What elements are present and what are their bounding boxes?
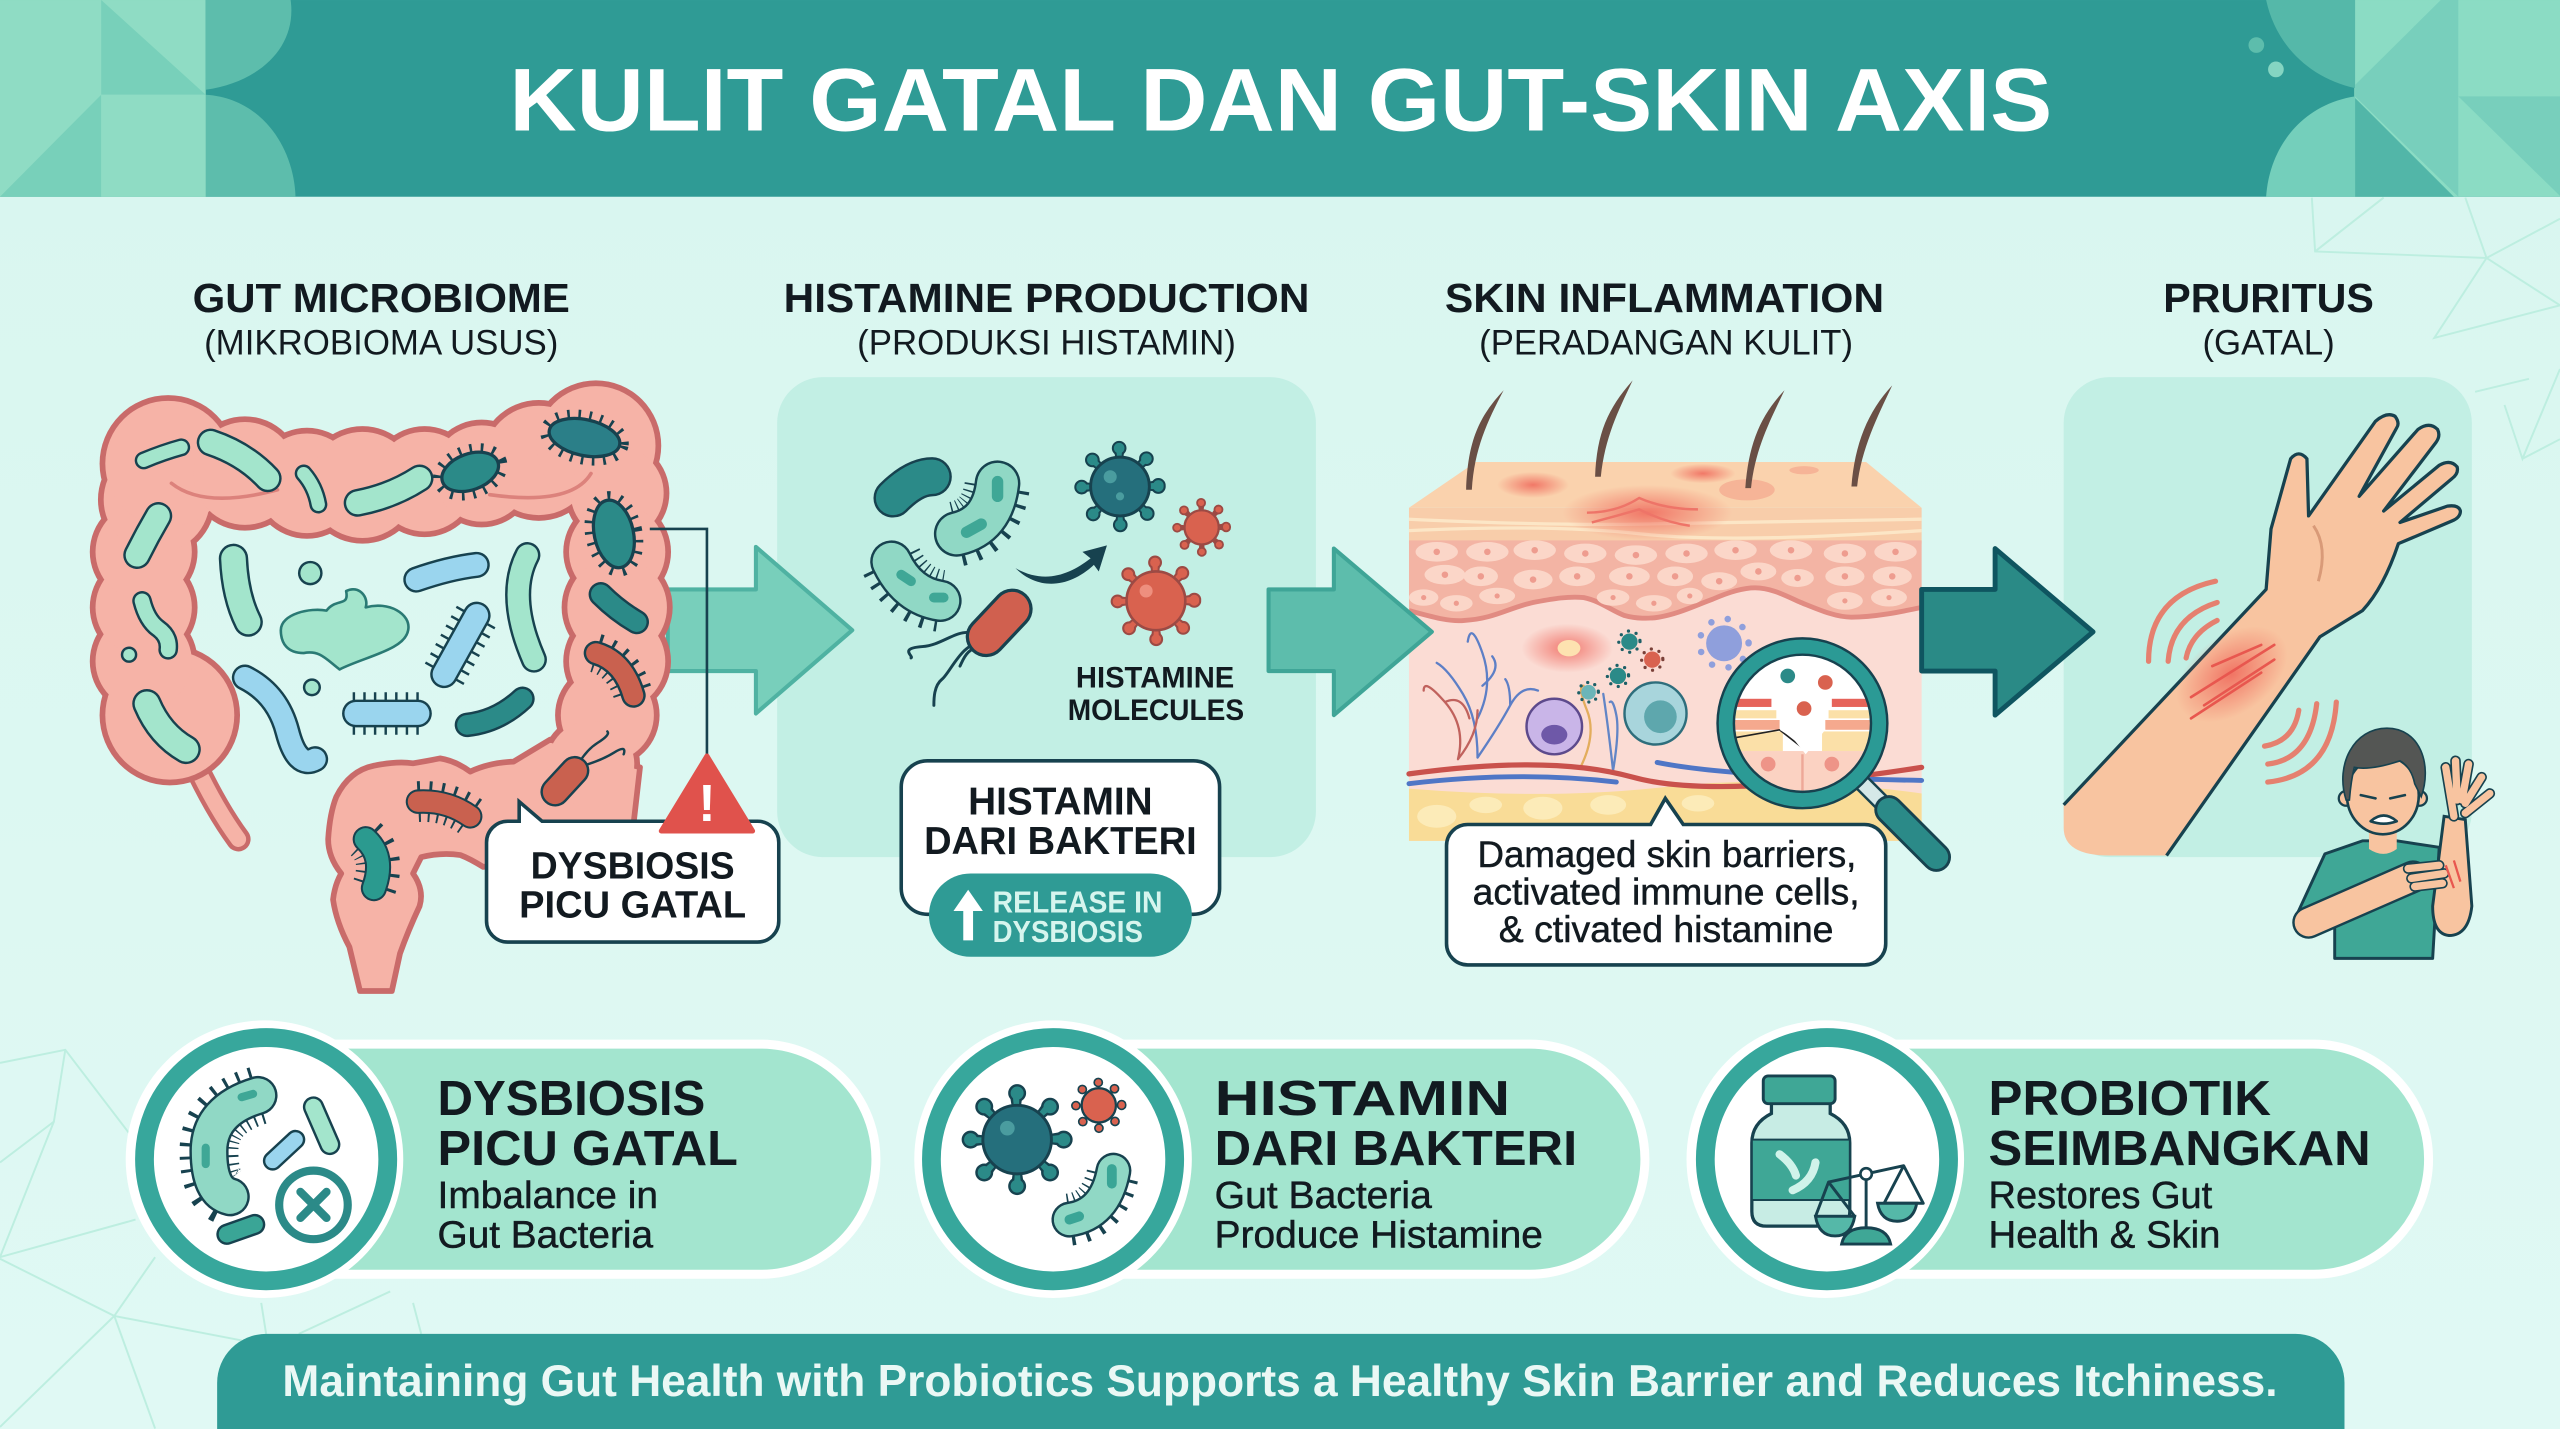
panel: histamine summary: Gut Bacteria — [1215, 1174, 1432, 1216]
panel: histamine summary: Produce Histamine — [1215, 1213, 1543, 1255]
histamine molecules — [1082, 448, 1226, 639]
footer banner: Maintaining Gut Health with Probiotics Supports a Healthy Skin Barrier and Reduces Itchiness. — [282, 1357, 2278, 1406]
panel: dysbiosis summary: Gut Bacteria — [438, 1213, 653, 1255]
label: histamine molecules — [1068, 661, 1244, 727]
panel: pruritus background — [2064, 377, 2472, 857]
itch redness — [2159, 607, 2305, 742]
icon: virus and bacteria — [971, 1082, 1122, 1186]
footer banner — [217, 1334, 2344, 1429]
header decoration left — [0, 0, 296, 197]
callout: dysbiosis picu gatal: PICU GATAL — [519, 884, 746, 926]
callout: histamin dari bakteri: HISTAMIN — [968, 781, 1153, 824]
arrow: histamine to skin — [1269, 549, 1432, 715]
panel: probiotic summary — [1687, 1020, 2429, 1298]
curved arrow — [1016, 545, 1107, 584]
icon: probiotic bottle and scale — [1752, 1076, 1923, 1244]
callout: skin damage description: Damaged skin barriers, — [1478, 834, 1856, 875]
inflammation redness — [1497, 464, 1819, 673]
skin cells — [1409, 540, 1917, 611]
badge: release in dysbiosis — [929, 873, 1192, 957]
heading: skin inflammation: SKIN INFLAMMATION — [1445, 275, 1884, 321]
heading: gut microbiome — [193, 275, 570, 362]
cell nuclei — [1421, 547, 1899, 606]
heading: gut microbiome: GUT MICROBIOME — [193, 275, 570, 321]
panel: dysbiosis summary — [126, 1020, 876, 1298]
bacteria in abdominal space — [233, 555, 534, 761]
callout: skin damage description: activated immune cells, — [1473, 871, 1860, 912]
arrow: skin to pruritus — [1922, 549, 2093, 715]
panel: dysbiosis summary: PICU GATAL — [438, 1122, 738, 1176]
panel: probiotic summary: Health & Skin — [1989, 1213, 2220, 1255]
panel: dysbiosis summary: DYSBIOSIS — [438, 1072, 705, 1126]
label: histamine molecules: HISTAMINE — [1076, 661, 1234, 694]
header decoration right — [2248, 0, 2560, 197]
panel: histamine summary: HISTAMIN — [1215, 1072, 1510, 1126]
skin layers — [1409, 462, 1922, 841]
panel: histamine summary: DARI BAKTERI — [1215, 1122, 1577, 1176]
heading: histamine production: HISTAMINE PRODUCTION — [784, 275, 1309, 321]
heading: pruritus — [2163, 275, 2374, 362]
label: histamine molecules: MOLECULES — [1068, 694, 1244, 727]
heading: gut microbiome: (MIKROBIOMA USUS) — [204, 323, 558, 362]
icon: warning triangle: ! — [698, 775, 716, 833]
illustration: scratching person — [2296, 728, 2490, 958]
badge: release in dysbiosis: DYSBIOSIS — [993, 916, 1143, 949]
heading: pruritus: (GATAL) — [2202, 323, 2335, 362]
heading: skin inflammation — [1445, 275, 1884, 362]
teal and red spiky bacteria in colon — [366, 411, 642, 888]
heading: histamine production — [784, 275, 1309, 362]
panel: dysbiosis summary: Imbalance in — [438, 1174, 658, 1216]
nerves and blood vessels — [1409, 633, 1922, 787]
title: KULIT GATAL DAN GUT-SKIN AXIS — [509, 50, 2052, 150]
green bacteria in colon — [129, 442, 420, 749]
icon: warning triangle — [661, 756, 753, 833]
callout: dysbiosis picu gatal — [487, 529, 779, 942]
panel: probiotic summary: PROBIOTIK — [1989, 1072, 2271, 1126]
panel: probiotic summary: Restores Gut — [1989, 1174, 2213, 1216]
hairs — [1466, 380, 1892, 490]
header banner — [0, 0, 2560, 197]
colon body — [90, 380, 673, 991]
heading: skin inflammation: (PERADANGAN KULIT) — [1479, 323, 1853, 362]
illustration: colon with bacteria — [90, 380, 673, 991]
callout: histamin dari bakteri: DARI BAKTERI — [924, 820, 1197, 863]
arrow: gut to histamine — [668, 547, 852, 713]
icon: magnifying glass — [1726, 647, 1936, 857]
immune cells — [1527, 619, 1749, 754]
bacteria — [891, 477, 1012, 705]
itch waves — [2149, 581, 2336, 782]
icon: imbalanced bacteria — [206, 1094, 348, 1239]
illustration: skin cross-section — [1409, 380, 1922, 841]
callout: histamin dari bakteri — [901, 761, 1220, 957]
callout: skin damage description — [1447, 798, 1886, 965]
heading: histamine production: (PRODUKSI HISTAMIN) — [857, 323, 1236, 362]
panel: histamine summary — [914, 1020, 1645, 1298]
panel: probiotic summary: SEIMBANGKAN — [1989, 1122, 2371, 1176]
panel: histamine background — [777, 377, 1316, 857]
illustration: itchy arm and hand — [2064, 415, 2460, 856]
heading: pruritus: PRURITUS — [2163, 275, 2374, 321]
illustration: histamine bacteria and molecules — [891, 448, 1244, 727]
callout: skin damage description: & ctivated histamine — [1499, 909, 1833, 950]
callout: dysbiosis picu gatal: DYSBIOSIS — [531, 844, 735, 886]
badge: release in dysbiosis: RELEASE IN — [993, 887, 1162, 920]
